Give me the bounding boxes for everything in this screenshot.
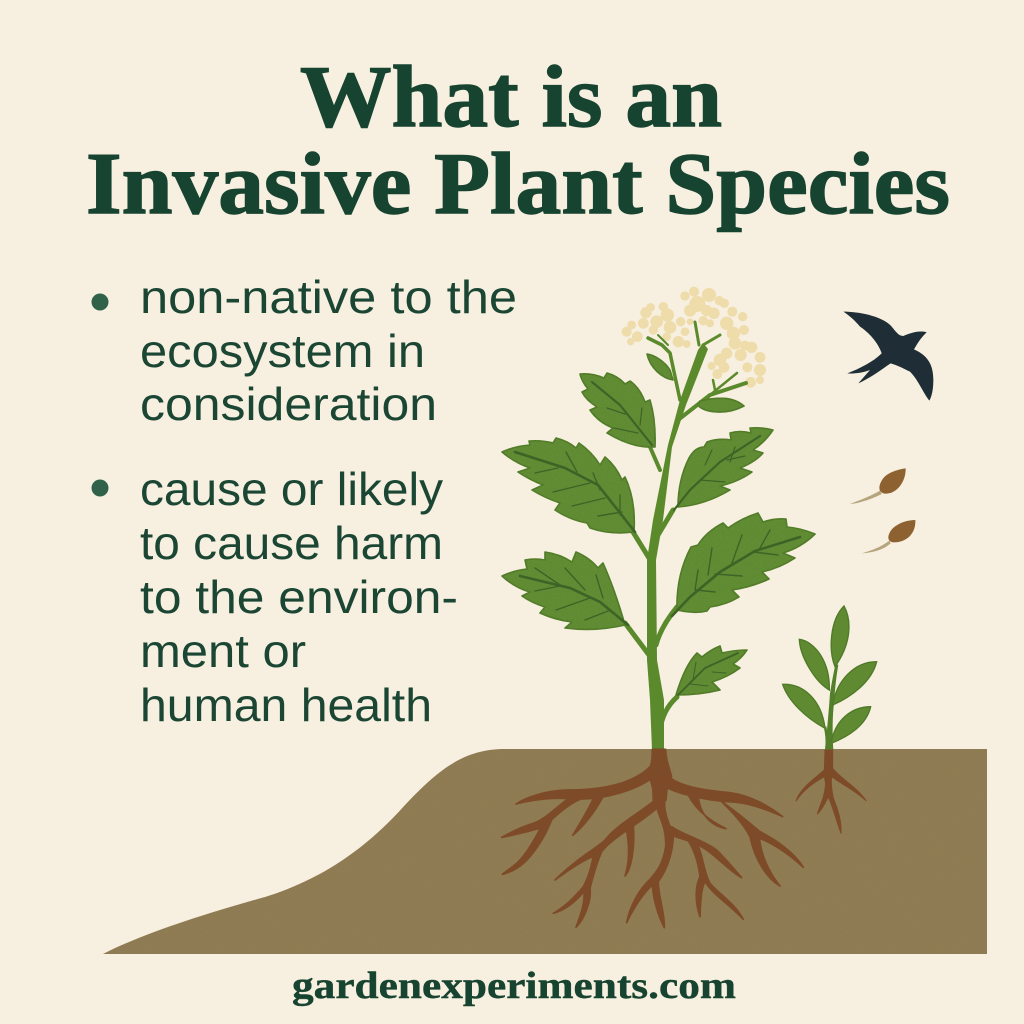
bullet 1: non-native xyxy=(92,271,517,430)
root system: seedling xyxy=(796,750,866,833)
flower cluster xyxy=(622,287,766,388)
title: What is an xyxy=(300,49,722,146)
small seedling xyxy=(783,606,877,750)
bullet 1: non-native: ecosystem in xyxy=(140,325,425,377)
leaf: upper left xyxy=(580,373,655,447)
stem and branches xyxy=(625,322,746,750)
leaf: small near flowers left xyxy=(647,354,673,380)
bullet 1: non-native: consideration xyxy=(140,378,437,430)
large invasive plant xyxy=(502,287,815,750)
seedling stem xyxy=(825,663,838,750)
seed 1 xyxy=(850,468,906,504)
bullet 2: causes harm: human health xyxy=(140,679,432,731)
bullet 2: causes harm xyxy=(92,463,458,731)
soil hill xyxy=(103,749,987,954)
leaf: upper right xyxy=(674,428,773,510)
root system: large plant xyxy=(502,749,803,928)
footer: website: gardenexperiments.com xyxy=(292,965,736,1007)
leaf: middle left xyxy=(502,438,635,533)
bullet 2: causes harm: cause or likely xyxy=(140,463,443,515)
leaf: lower right small xyxy=(676,646,747,695)
bullet list: definition points xyxy=(92,271,517,731)
seedling leaves xyxy=(783,606,877,743)
bullet 2: causes harm: to the environ- xyxy=(140,571,458,623)
leaf: lower left xyxy=(502,552,628,629)
bullet 2: causes harm: to cause harm xyxy=(140,517,443,569)
leaf: small near flowers right xyxy=(698,398,744,412)
bullet 2: causes harm: ment or xyxy=(140,625,306,677)
icon: seeds xyxy=(850,468,915,553)
bullet 1: non-native: non-native to the xyxy=(140,271,517,323)
title: Invasive Plant Species xyxy=(86,136,950,233)
title xyxy=(86,49,950,233)
icon: bird xyxy=(843,312,933,401)
leaf: middle right xyxy=(672,513,815,616)
seed 2 xyxy=(862,520,915,553)
